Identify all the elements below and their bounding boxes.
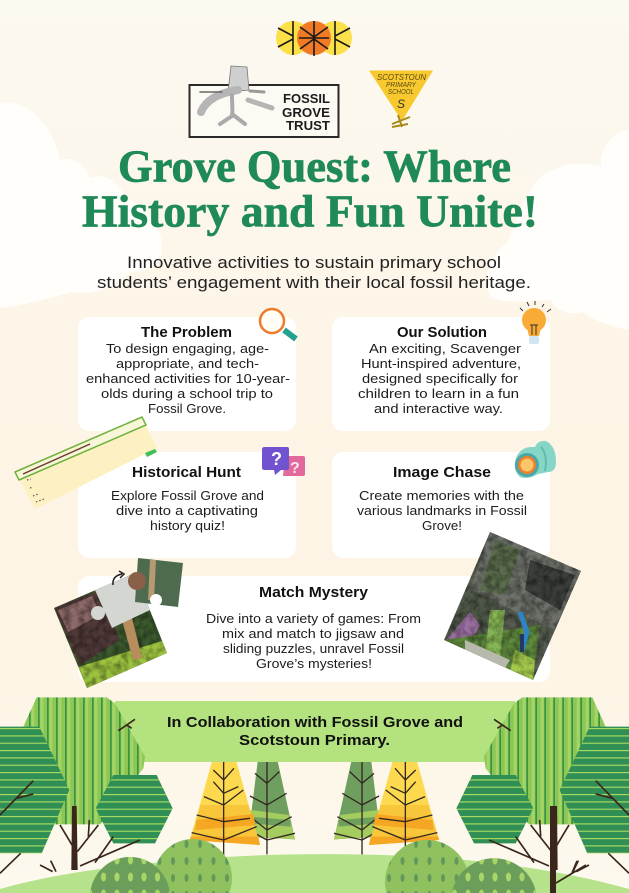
logo: Scotstoun Primary School badge: PRIMARY	[386, 82, 417, 89]
background cloud: right	[487, 130, 629, 330]
logo: Scotstoun Primary School badge: S	[397, 97, 405, 111]
panel: our solution: designed specifically for	[362, 371, 519, 386]
panel: match mystery: Dive into a variety of games: From	[206, 611, 421, 626]
ground	[0, 854, 629, 893]
icon: question speech bubbles: ?	[271, 449, 282, 469]
panel: image chase: Grove!	[422, 518, 462, 533]
photo: child at rock face	[440, 528, 585, 683]
panel: our solution: An exciting, Scavenger	[369, 341, 522, 356]
panel: our solution: Our Solution	[397, 324, 487, 341]
panel: image chase: Image Chase	[393, 464, 491, 481]
panel: match mystery: Match Mystery	[259, 584, 369, 601]
panel: the problem	[78, 317, 296, 431]
pine tree: left yellow	[190, 757, 260, 855]
panel: image chase: Create memories with the	[359, 488, 524, 503]
icon: camera	[515, 441, 556, 478]
title	[82, 140, 538, 236]
pine tree: right green	[334, 757, 381, 854]
panel: historical hunt: dive into a captivating	[116, 503, 258, 518]
subtitle: students’ engagement with their local fossil heritage.	[97, 274, 531, 292]
logo wordmark	[282, 91, 330, 133]
panel: our solution: Hunt-inspired adventure,	[361, 356, 521, 371]
icon: tree emblem	[276, 21, 352, 56]
pine tree: right yellow	[369, 757, 439, 855]
subtitle	[97, 254, 531, 292]
icon: question speech bubbles	[262, 447, 305, 477]
bush: left light	[154, 839, 232, 893]
icon: question speech bubbles: ?	[290, 460, 300, 477]
banner: collaboration: In Collaboration with Fossil Grove and	[167, 714, 463, 731]
panel: image chase: various landmarks in Fossil	[357, 503, 527, 518]
panel: match mystery	[78, 576, 550, 682]
arrow	[113, 571, 124, 585]
pine tree: left green	[248, 757, 295, 854]
panel: match mystery: Grove’s mysteries!	[256, 656, 372, 671]
panel: the problem: appropriate, and tech-	[116, 356, 259, 371]
background cloud: left	[0, 103, 162, 308]
banner: collaboration: Scotstoun Primary.	[239, 732, 390, 749]
panel: image chase	[332, 452, 550, 558]
panel: match mystery: sliding puzzles, unravel Fossil	[223, 641, 404, 656]
logo: Scotstoun Primary School badge: SCHOOL	[388, 89, 414, 96]
logo: Scotstoun Primary School badge: SCOTSTOUN	[377, 73, 426, 82]
panel: historical hunt	[78, 452, 296, 558]
panel: our solution: and interactive way.	[374, 401, 503, 416]
panel: the problem: To design engaging, age-	[106, 341, 269, 356]
bush: right light	[385, 840, 469, 893]
panel: our solution	[332, 317, 550, 431]
puzzle piece	[135, 558, 183, 607]
panel: historical hunt: Explore Fossil Grove and	[111, 488, 264, 503]
banner: collaboration	[115, 701, 515, 762]
logo wordmark: TRUST	[286, 118, 330, 133]
panel: historical hunt: Historical Hunt	[132, 464, 241, 481]
title: Grove Quest: Where	[118, 140, 511, 192]
bush: right dark	[452, 858, 536, 893]
logo: Scotstoun Primary School badge	[369, 70, 433, 127]
icon: light bulb	[520, 301, 551, 344]
logo wordmark: GROVE	[282, 105, 330, 120]
panel: the problem: The Problem	[141, 324, 232, 341]
bush: left dark	[90, 857, 170, 893]
quiz screen mockup	[15, 417, 157, 509]
large tree: left	[0, 697, 173, 873]
title: History and Fun Unite!	[82, 186, 538, 236]
icon: fossil tree stump	[200, 66, 272, 124]
panel: the problem: enhanced activities for 10-year-	[86, 371, 290, 386]
panel: the problem: olds during a school trip to	[101, 386, 273, 401]
panel: historical hunt: history quiz!	[150, 518, 225, 533]
logo wordmark: FOSSIL	[283, 91, 330, 106]
large tree: right	[456, 697, 629, 893]
panel: match mystery: mix and match to jigsaw and	[222, 626, 404, 641]
logo: Fossil Grove Trust	[190, 66, 338, 137]
panel: our solution: children to learn in a fun	[358, 386, 519, 401]
icon: magnifying glass	[260, 309, 296, 339]
photo: jigsaw puzzle	[54, 558, 183, 688]
subtitle: Innovative activities to sustain primary school	[127, 254, 501, 272]
panel: the problem: Fossil Grove.	[148, 401, 226, 416]
